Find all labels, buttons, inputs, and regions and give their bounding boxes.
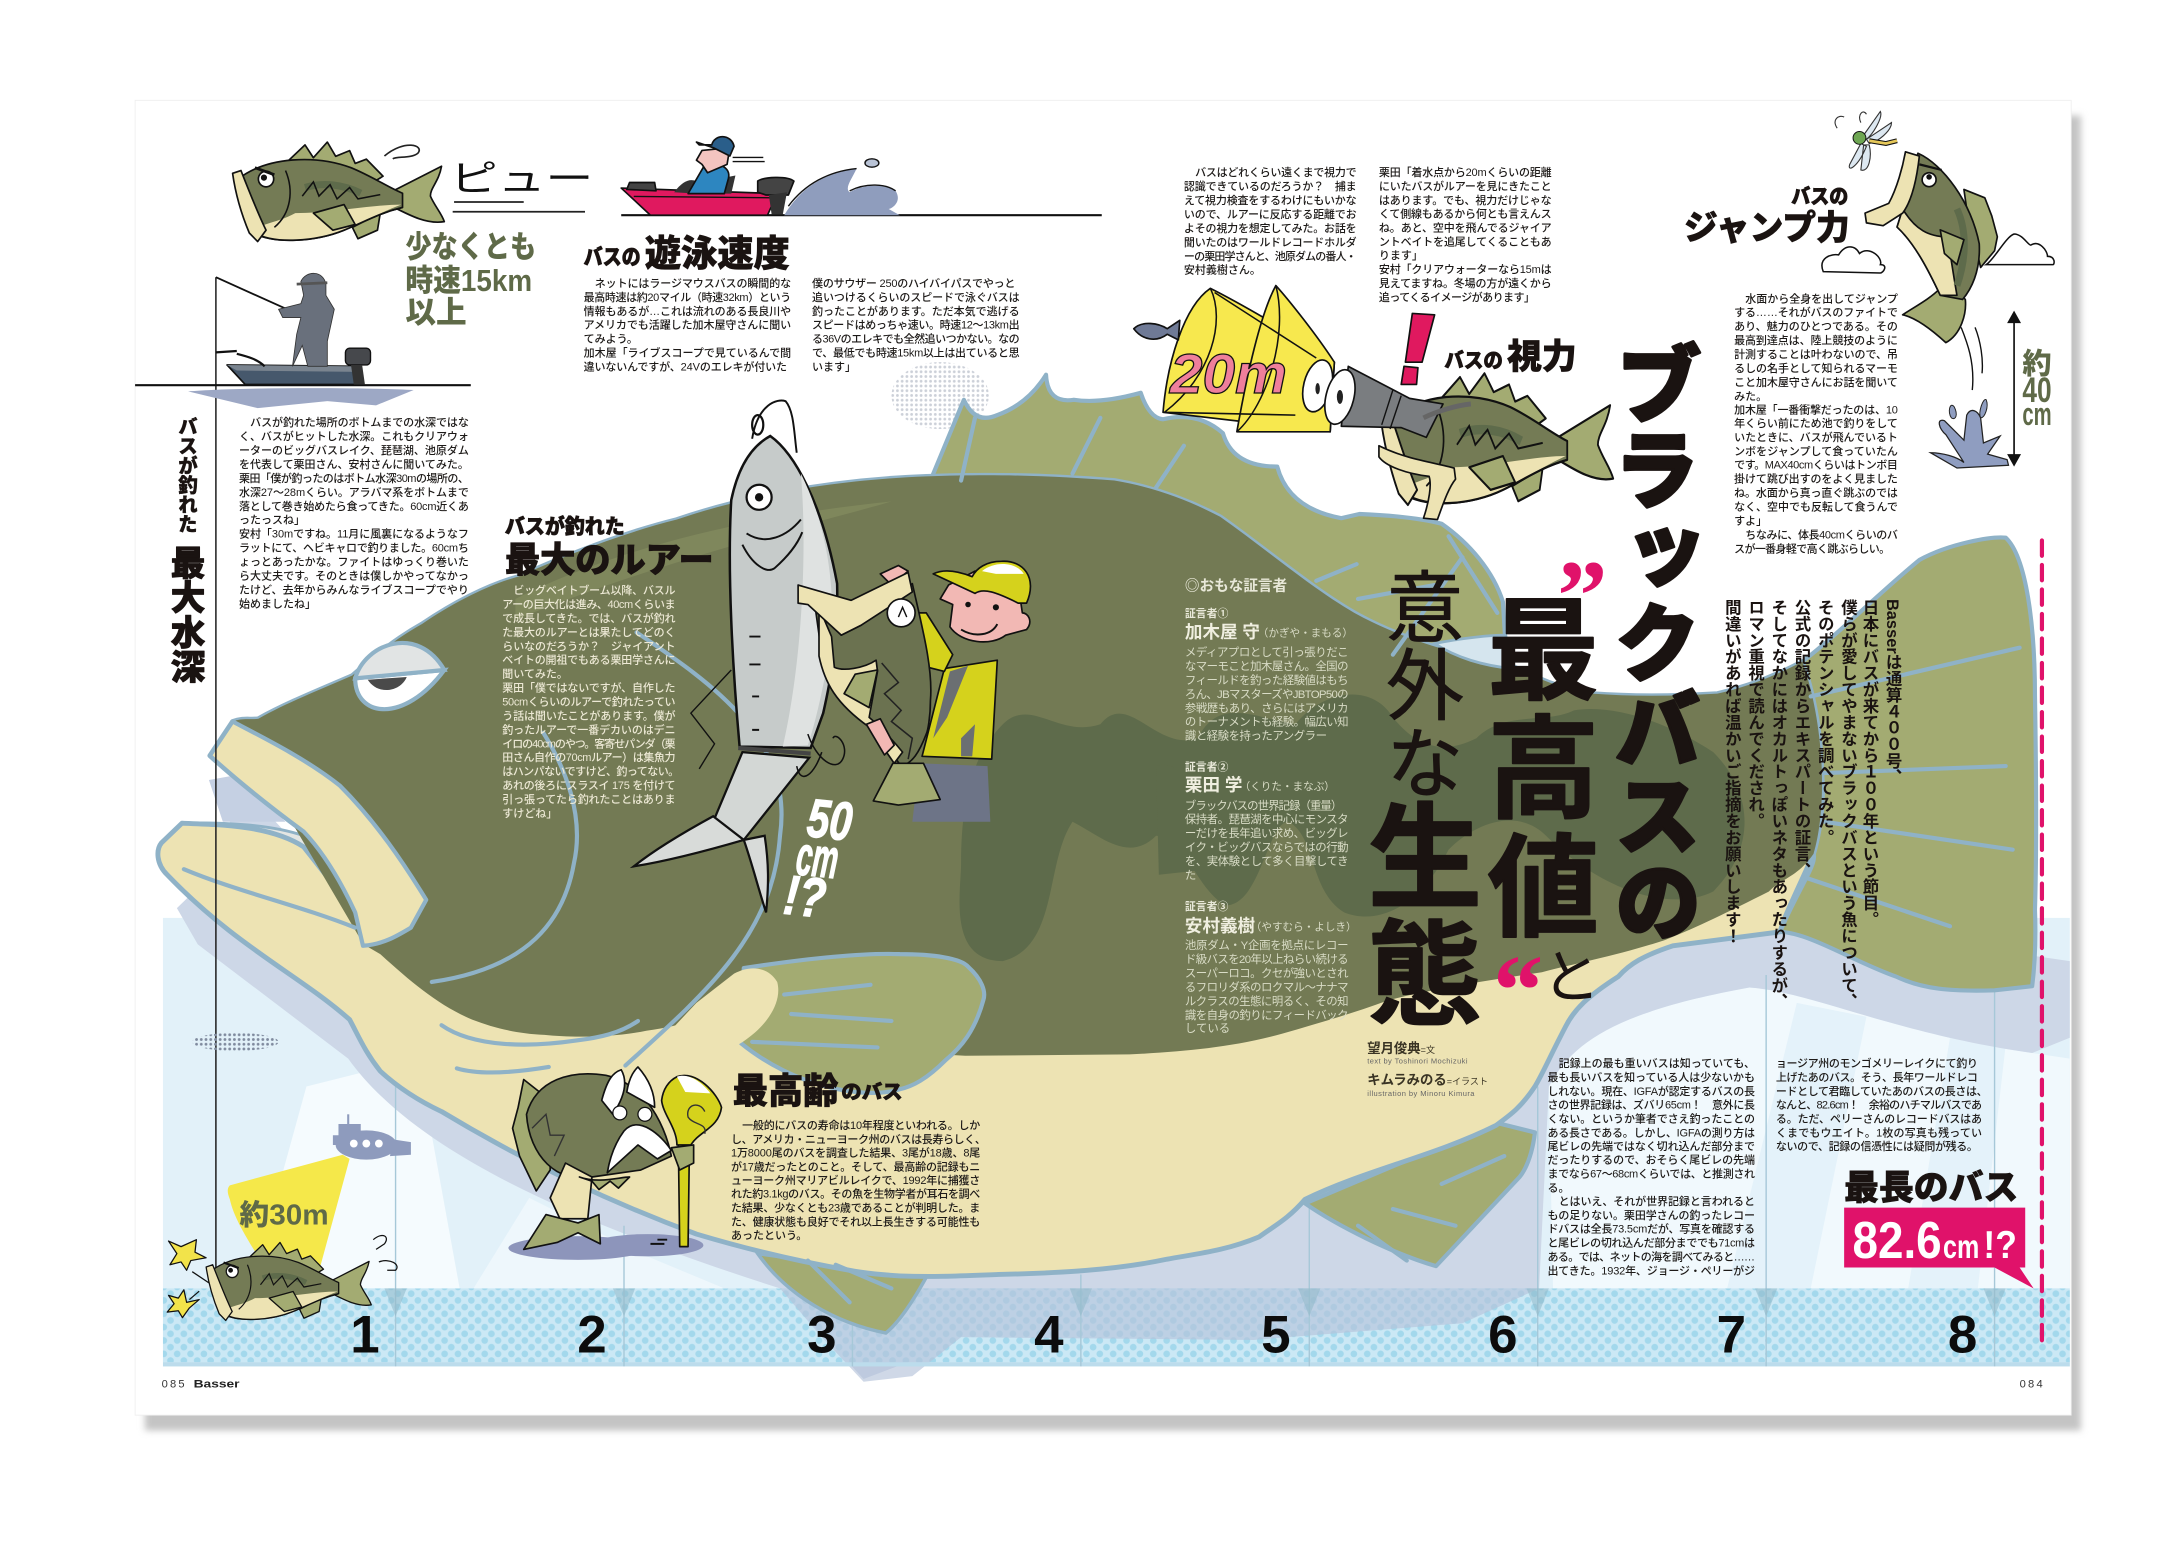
text block: longest bass left [1547, 1056, 1755, 1277]
witness 3: 安村義樹 [1185, 916, 1256, 936]
text block: longest bass left: 尾ビレの先端ではなく切れ込んだ部分まで [1547, 1139, 1755, 1153]
text block: jump power: いたときに、バスが飛んでいるト [1734, 430, 1898, 444]
text block: jump power: 水面から全身を出してジャンプ [1745, 291, 1898, 305]
magazine page [135, 100, 2071, 1415]
text block: depth: 安村「30mですね。11月に風裏になるようなフ [239, 527, 469, 541]
dot shading behind dorsal fin [891, 362, 989, 429]
text block: oldest bass: し、アメリカ・ニューヨーク州のバスは長寿らしく、 [731, 1132, 986, 1146]
text block: eyesight right: ントベイトを追尾してくることもあ [1379, 234, 1552, 248]
text block: eyesight right: ります」 [1379, 249, 1423, 262]
witness 3: 証言者③ [1185, 899, 1228, 913]
text block: eyesight left: 安村義樹さん。 [1184, 263, 1261, 277]
text block: jump power: スが一番身軽で高く跳ぶらしい。 [1734, 541, 1890, 555]
main title: ブラックバスの [1595, 340, 1720, 944]
text block: swimming speed right: スピードはめっちゃ速い。時速12～13km出 [812, 318, 1020, 332]
main title: 最高値 [1463, 592, 1624, 947]
text block: longest bass left: る。 [1547, 1181, 1569, 1194]
text block: eyesight left [1184, 165, 1357, 277]
text block: jump power: 最高到達点は、陸上競技のように [1734, 333, 1898, 347]
witness 3: 池原ダム・Y企画を拠点にレコー [1185, 938, 1349, 952]
text block: jump power [1734, 291, 1898, 555]
text block: eyesight left: ーの栗田学さんと、池原ダムの番人・ [1184, 249, 1357, 263]
witness 1: ろん、JBマスターズやJBTOP50の [1185, 687, 1349, 701]
text block: longest bass right: ードとして君臨していたあのバスの長さは、 [1776, 1085, 1988, 1098]
main title: と [1542, 929, 1600, 1014]
heading: biggest lure: バスが釣れた [505, 510, 625, 539]
lead text: ロマン重視で読んでくだされ。 [1746, 599, 1765, 829]
text block: depth: く、バスがヒットした水深。これもクリアウォ [239, 429, 469, 443]
witness 3: ド級バスを20年以上ねらい続ける [1185, 952, 1349, 966]
icon: bass boat with driver [621, 137, 900, 215]
text block: oldest bass: 1万8000尾のバスを調査した結果、3尾が18歳、8尾 [731, 1146, 980, 1160]
credits: キムラみのる=イラスト [1367, 1072, 1488, 1087]
text block: swimming speed left: てみよう。 [584, 333, 638, 346]
lead text: Basserは通算４００号、 [1883, 599, 1902, 785]
text block: biggest lure: 引っ張ってたら釣れたことはありま [502, 792, 676, 806]
icon: yellow vision cones with 20m: 20m [1169, 343, 1287, 405]
pectoral fin [741, 954, 984, 1093]
heading: biggest lure: 最大のルアー [505, 532, 714, 583]
callout: at least 15 km/h: 時速15km [405, 264, 532, 298]
water background [163, 918, 2070, 1366]
dark back of the bass [233, 475, 1822, 1056]
text block: longest bass right: ョージア州のモンゴメリーレイクにて釣り [1776, 1056, 1978, 1070]
icon: jumping bass [1865, 152, 1997, 343]
text block: jump power: すよ」 [1734, 514, 1767, 527]
icon: submarine [333, 1114, 411, 1160]
dark blotches [960, 694, 1745, 961]
callout: about 40cm: cm [2022, 396, 2052, 432]
text block: jump power: こと加木屋守さんにお話を聞いて [1734, 375, 1898, 389]
lead text [1722, 599, 1902, 1010]
icon: yellow vision cones with 20m [1134, 286, 1334, 432]
witness 1: （かぎや・まもる） [1258, 627, 1353, 640]
witness 1: 証言者① [1185, 606, 1228, 620]
text block: swimming speed right: 僕のサウザー 250のハイバイパスでやっと [812, 276, 1015, 290]
fish shadow on water [177, 780, 2070, 1379]
text block: eyesight right: くて側線もあるから何とも言えんス [1379, 207, 1552, 221]
sonar beam with depth label: 約30m [240, 1199, 329, 1231]
text block: longest bass left: ドバスは全長73.5cmだが、写真を確認する [1547, 1222, 1755, 1236]
text block: biggest lure: イロの40cmのやつ。客寄せパンダ（栗 [502, 736, 676, 750]
text block: eyesight left: いので、ルアーに反応する距離でお [1184, 207, 1357, 221]
eye of the bass [355, 643, 444, 709]
lead text: 公式の記録からエキスパートの証言、 [1792, 599, 1811, 878]
text block: longest bass right: ないので、記録の信憑性には疑問が残る。 [1776, 1139, 1978, 1153]
text block: jump power: ちなみに、体長40cmくらいのバ [1745, 527, 1898, 541]
main title [1342, 340, 1720, 1046]
text block: biggest lure: 栗田「僕ではないですが、自作した [502, 681, 676, 695]
text block: biggest lure: アーの巨大化は進み、40cmくらいま [502, 597, 676, 611]
text block: jump power: です。MAX40cmくらいはトンボ目 [1734, 459, 1898, 472]
heading: main witnesses: ◎おもな証言者 [1185, 578, 1287, 595]
text block: biggest lure: らいなのだろうか？ ジャイアント [502, 640, 676, 653]
text block: longest bass left: もの足りない。栗田学さんの釣ったレコー [1547, 1208, 1755, 1222]
text block: swimming speed right [812, 276, 1020, 374]
text block: longest bass left: 出てきた。1932年、ジョージ・ペリーがジ [1547, 1263, 1755, 1277]
icon: dragonfly [1835, 111, 1897, 170]
heading: jump power: バスの [1791, 180, 1848, 209]
text block: eyesight left: えて視力検査をするわけにもいかな [1184, 193, 1357, 207]
scale numbers: 2 [577, 1305, 607, 1364]
dotted water band [163, 1288, 2070, 1362]
text block: depth [239, 415, 469, 610]
scale numbers [350, 1305, 1977, 1364]
text block: longest bass right: 上げたあのバス。そう、長年ワールドレコ [1776, 1070, 1978, 1084]
heading: swimming speed: バスの [584, 241, 641, 272]
callout: 50cm!?: !? [781, 864, 829, 930]
icon: angler on small boat [188, 273, 414, 408]
text block: oldest bass: た結果、少なくとも23歳であることが判明した。ま [731, 1201, 980, 1215]
text block: eyesight right: 安村「クリアウォーターなら15mは [1379, 262, 1552, 276]
text block: longest bass left: までなら67～68cmくらいでは、と推測され [1547, 1167, 1755, 1181]
light crescent under second fin [1435, 635, 1513, 669]
black depth line [215, 277, 217, 1281]
fin rays and gill lines [184, 418, 2020, 1302]
text block: swimming speed left: 加木屋「ライブスコープで見ているんで間 [584, 346, 791, 360]
text block: eyesight left: バスはどれくらい遠くまで視力で [1195, 165, 1357, 179]
text block: jump power: 年くらい前にため池で釣りをして [1734, 416, 1898, 430]
witness 3: 識を自身の釣りにフィードバック [1185, 1008, 1349, 1022]
scale numbers: 8 [1948, 1305, 1977, 1364]
text block: oldest bass: れた約3.1kgのバス。その魚を生物学者が耳石を調べ [731, 1187, 980, 1201]
text block: depth: ラットにて、ヘビキャロで釣りました。60cmち [239, 541, 469, 555]
text block: longest bass left: さの世界記録は、ズバリ65cm！ 意外に長 [1547, 1098, 1755, 1112]
heading: oldest bass: 最高齢 [733, 1063, 839, 1114]
text block: biggest lure: はハンパないですけど、釣ってない。 [502, 764, 679, 778]
witness 3: るフロリダ系のロクマル～ナナマ [1185, 980, 1349, 994]
callout: about 40cm: 約 [2022, 347, 2052, 380]
mouth interior [181, 823, 355, 912]
witness 1: のトーナメントも経験。幅広い知 [1185, 715, 1349, 729]
callout: about 40cm: 40 [2022, 371, 2052, 410]
lead text: 間違いがあれば温かいご指摘をお願いします！ [1722, 599, 1742, 944]
witness 2: 証言者② [1185, 759, 1228, 773]
arrow: jump height [2007, 311, 2021, 467]
text block: jump power: みた。 [1734, 390, 1767, 403]
lighter back highlight [515, 501, 891, 620]
paper drop shadow [145, 116, 2081, 1430]
footer right: 084 [2020, 1378, 2045, 1390]
text block: depth: たけど、去年からみんなライブスコープでやり [239, 582, 469, 596]
text block: jump power: なく、空中でも反転して食うんで [1734, 500, 1898, 514]
body silhouette [158, 475, 1822, 1276]
credits: illustration by Minoru Kimura [1367, 1089, 1475, 1098]
text block: biggest lure: あれの後ろにスラスイ 175 を付けて [502, 778, 676, 792]
text block: longest bass left: だったりするので、おそらく尾ビレの先端 [1547, 1153, 1755, 1167]
callout: at least 15 km/h: 少なくとも [405, 231, 536, 265]
main title: 生態 [1342, 798, 1507, 1032]
scale numbers: 4 [1034, 1305, 1064, 1364]
witness 1: なマーモこと加木屋さん。全国の [1185, 659, 1349, 673]
witness 2 [1185, 759, 1349, 882]
callout: 82.6cm: 82.6 [1852, 1211, 1942, 1269]
heading: eyesight [1444, 329, 1577, 379]
scale numbers: 6 [1488, 1305, 1518, 1364]
text block: oldest bass [731, 1118, 986, 1242]
text block: depth: ったっスね」 [239, 514, 305, 527]
heading: longest bass: 最長のバス [1844, 1160, 2018, 1210]
pink quote open: ” [1557, 541, 1607, 652]
text block: longest bass left: くない。というか筆者でさえ釣ったことの [1547, 1112, 1755, 1126]
heading: depth: バスが釣れた [174, 416, 203, 533]
text block: longest bass left: と尾ビレの切れ込んだ部分まででも71cmは [1547, 1236, 1755, 1250]
text block: swimming speed left: ネットにはラージマウスバスの瞬間的な [595, 276, 791, 290]
text block: jump power: ンボをジャンプして食っていたん [1734, 444, 1898, 458]
upper lip [210, 722, 426, 946]
text block: biggest lure: ビッグベイトブーム以降、バスル [513, 583, 676, 597]
text block: depth: ょっとあったかな。ファイトはゆっくり巻いた [239, 555, 469, 569]
text block: biggest lure: ベイトの開祖でもある栗田学さんに [502, 653, 676, 667]
witness 1: 参戦歴もあり、さらにはアメリカ [1185, 702, 1349, 715]
witness 2: ーだけを長年追い求め、ビッグレ [1185, 826, 1349, 840]
icon: speeding bass [233, 142, 444, 242]
scale numbers: 7 [1717, 1305, 1746, 1364]
text block: biggest lure: すけどね」 [502, 807, 557, 820]
speed sound effect [384, 145, 593, 212]
text block: biggest lure [502, 583, 679, 820]
heading: eyesight: 視力 [1507, 329, 1577, 379]
witness 3: ルクラスの生態に明るく、その知 [1185, 994, 1349, 1008]
witness 3: （やすむら・よしき） [1251, 920, 1357, 933]
text block: eyesight right: ね。あと、空中を飛んでるジャイア [1379, 221, 1552, 235]
text block: biggest lure: 聞いてみた。 [502, 668, 568, 681]
text block: swimming speed right: る36Vのエレキでも全然追いつかない。なの [812, 332, 1020, 346]
text block: eyesight left: 聞いたのはワールドレコードホルダ [1184, 235, 1357, 249]
text block: swimming speed right: 追いつけるくらいのスピードで泳ぐバスは [812, 290, 1020, 304]
text block: longest bass right: くまでもウエイト。1枚の写真も残ってい [1776, 1126, 1982, 1140]
text block: eyesight right: 栗田「着水点から20mくらいの距離 [1379, 165, 1552, 179]
text block: swimming speed left: 情報もあるが…これは流れのある長良川や [584, 304, 791, 318]
scale numbers: 1 [350, 1305, 380, 1364]
text block: longest bass left: しれない。現在、IGFAが認定するバスの長 [1547, 1084, 1755, 1098]
text block: eyesight right: 追ってくるイメージがあります」 [1379, 290, 1535, 304]
text block: oldest bass: た、健康状態も良好でそれ以上長生きする可能性も [731, 1214, 980, 1228]
dotted fish shadow [192, 1033, 279, 1051]
text block: eyesight left: 認識できているのだろうか？ 捕ま [1184, 179, 1357, 193]
text block: eyesight right: 見えてますね。冬場の方が遠くから [1379, 276, 1552, 290]
text block: oldest bass: が17歳だったとのこと。そして、最高齢の記録もニ [731, 1159, 980, 1173]
dorsal fin [930, 375, 1507, 669]
witness 3 [1185, 899, 1357, 1035]
icon: impact stars [167, 1235, 397, 1318]
text block: eyesight right: はあります。でも、視力だけじゃな [1379, 193, 1552, 207]
text block: jump power: する……それがバスのファイトで [1734, 305, 1898, 319]
witness 2: 保持者。琵琶湖を中心にモンスタ [1185, 812, 1349, 826]
text block: oldest bass: あったという。 [731, 1229, 807, 1242]
text block: longest bass right: る。ただ、ペリーさんのレコードバスはあ [1776, 1113, 1982, 1126]
callout: 50cm!? [781, 786, 855, 932]
text block: jump power: 計測することは叶わないので、吊 [1734, 347, 1898, 361]
icon: splash [1930, 327, 2008, 468]
surface line left [135, 384, 471, 386]
text block: swimming speed right: 釣ったことがあります。ただ本気で逃げる [812, 304, 1020, 318]
anal fin [1305, 1123, 1535, 1266]
surface line top [621, 214, 1102, 216]
witness 2: た [1185, 869, 1196, 882]
heading: jump power: ジャンプ力 [1684, 200, 1850, 250]
credits [1367, 1040, 1488, 1098]
text block: longest bass left: 記録上の最も重いバスは知っていても、 [1559, 1056, 1755, 1070]
icon: pink exclamation mark [1401, 313, 1435, 384]
callout: 82.6cm: !? [1983, 1224, 2017, 1267]
credits: 望月俊典=文 [1367, 1040, 1435, 1056]
witness 2: ブラックバスの世界記録（重量） [1185, 798, 1342, 812]
text block: longest bass left: とはいえ、それが世界記録と言われると [1559, 1194, 1755, 1208]
callout: about 40cm [2022, 347, 2052, 432]
text block: swimming speed right: います」 [812, 361, 856, 374]
credits: text by Toshinori Mochizuki [1367, 1057, 1468, 1066]
witness 2: イク・ビッグバスならではの行動 [1185, 840, 1349, 854]
witness 2: を、実体験として多く目撃してき [1185, 854, 1349, 868]
witness 1 [1185, 606, 1353, 743]
heading: oldest bass [733, 1063, 903, 1114]
text block: biggest lure: 田さん自作の70cmルアー）は集魚力 [502, 750, 676, 764]
text block: swimming speed left [584, 276, 791, 374]
speed sound effect: ピュー [450, 158, 593, 199]
text block: jump power: あり、魅力のひとつである。その [1734, 319, 1898, 333]
text block: eyesight left: よその視力を想定してみた。お話を [1184, 221, 1357, 235]
text block: oldest bass: ューヨーク州マリアビルレイクで、1992年に捕獲さ [731, 1173, 980, 1187]
lead text: 日本にバスが来てから１００年という節目。 [1860, 599, 1879, 928]
text block: depth: バスが釣れた場所のボトムまでの水深ではな [250, 415, 469, 429]
main title: 意外な [1369, 567, 1481, 801]
callout: at least 15 km/h: 以上 [405, 296, 467, 330]
bottom pelvic fin [758, 1254, 926, 1333]
icon: giant lure [634, 401, 845, 912]
lead text: そしてなかにはオカルトっぽいネタもあったりするが、 [1769, 599, 1788, 1010]
witness 1: 加木屋 守 [1185, 622, 1260, 642]
sonar beam with depth label [228, 1155, 350, 1266]
panel: witnesses [1185, 578, 1357, 1035]
footer left: Basser [194, 1378, 240, 1390]
callout: 50cm!?: cm [794, 824, 842, 890]
column rulers [384, 975, 2006, 1366]
text block: longest bass left: 最も長いバスを知っている人は少ないかも [1547, 1070, 1755, 1084]
text block: depth: を代表して栗田さん、安村さんに聞いてみた。 [239, 457, 469, 471]
witness 1: フィールドを釣った経験値はもち [1185, 673, 1349, 687]
text block: jump power: ね。水面から真っ直ぐ跳ぶのでは [1734, 486, 1898, 500]
tail fin [1780, 537, 2036, 991]
text block: jump power: 掛けて跳び出すのをよく見ました [1734, 472, 1898, 486]
text block: biggest lure: う話は聞いたことがあります。僕が [502, 708, 676, 722]
text block: jump power: 加木屋「一番衝撃だったのは、10 [1734, 403, 1898, 417]
text block: longest bass right [1776, 1056, 1988, 1153]
text block: depth: 落として巻き始めたら食ってきた。60cm近くあ [239, 499, 469, 513]
lead text: 僕らが愛してやまないブラックバスという魚について、 [1838, 599, 1858, 1010]
text block: eyesight right [1379, 165, 1552, 304]
dashed length marker [2040, 540, 2043, 1344]
text block: biggest lure: 50cmくらいのルアーで釣れたってい [502, 695, 676, 709]
witness 2: 栗田 学 [1185, 775, 1242, 795]
text block: depth: ーターのビッグバスレイク、琵琶湖、池原ダム [239, 443, 469, 457]
footer left: 085 [162, 1378, 187, 1390]
heading: depth: 最大水深 [163, 545, 213, 684]
text block: depth: 栗田「僕が釣ったのはボトム水深30mの場所の、 [239, 471, 469, 485]
purple shadow across band [780, 1288, 1539, 1382]
witness 1: 識と経験を持ったアングラー [1185, 729, 1327, 743]
callout: 82.6cm: cm [1943, 1229, 1979, 1266]
text block: longest bass left: ある長さである。しかし、IGFAの測り方は [1547, 1126, 1755, 1140]
heading: eyesight: バスの [1444, 345, 1503, 374]
witness 1: メディアプロとして引っ張りだこ [1185, 645, 1349, 659]
text block: swimming speed right: で、最低でも時速15km以上は出ていると思 [812, 346, 1020, 360]
text block: oldest bass: 一般的にバスの寿命は10年程度といわれる。しか [742, 1118, 980, 1132]
icon: clouds [1822, 234, 2054, 273]
witness 3: スーパーロコ。クセが強いとされ [1185, 966, 1349, 980]
text block: longest bass right: なんと、82.6cm！ 余裕のハチマルバスであ [1776, 1098, 1982, 1112]
text block: biggest lure: で成長してきた。では、バスが釣れ [502, 611, 676, 625]
icon: bass with binoculars [1298, 357, 1613, 520]
callout: 50cm!?: 50 [805, 787, 855, 853]
icon: old bass with cane [508, 1067, 722, 1260]
lead text: そのポテンシャルを調べてみた。 [1815, 599, 1834, 845]
footer left [162, 1378, 240, 1390]
text block: swimming speed left: アメリカでも活躍した加木屋守さんに聞い [584, 318, 791, 332]
text block: depth: ら大丈夫です。そのときは僕しかやってなかっ [239, 568, 469, 582]
text block: eyesight right: にいたバスがルアーを見にきたこと [1379, 179, 1552, 193]
witness 3: している [1185, 1022, 1230, 1035]
pectoral fin root [655, 968, 778, 1047]
big bass illustration [158, 362, 2036, 1333]
witness 2: （くりた・まなぶ） [1240, 780, 1335, 793]
icon: bass hitting bottom [206, 1242, 371, 1320]
text block: longest bass left: ある。では、ネットの海を調べてみると…… [1547, 1250, 1755, 1264]
text block: depth: 水深27～28mくらい。アラバマ系をボトムまで [239, 485, 469, 499]
scale numbers: 3 [807, 1305, 837, 1364]
heading: swimming speed: 遊泳速度 [645, 225, 790, 277]
text block: jump power: るしの名手として知られるマーモ [1734, 361, 1898, 375]
text block: depth: 始めましたね」 [239, 596, 316, 610]
heading: depth [163, 416, 213, 684]
scale numbers: 5 [1261, 1305, 1291, 1364]
text block: swimming speed left: 最高時速は約20マイル（時速32km）という [584, 290, 791, 304]
heading: oldest bass: のバス [841, 1075, 903, 1104]
icon: man holding bass [798, 561, 1030, 822]
pink quote close: “ [1493, 935, 1543, 1046]
text block: biggest lure: た最大のルアーとは果たしてどのく [502, 625, 676, 639]
callout: at least 15 km/h [405, 231, 536, 330]
text block: swimming speed left: 違いないんですが、24Vのエレキが付いた [584, 360, 787, 374]
callout: 82.6cm [1844, 1208, 2034, 1288]
text block: biggest lure: 釣ったルアーで一番デカいのはデニ [502, 722, 676, 736]
